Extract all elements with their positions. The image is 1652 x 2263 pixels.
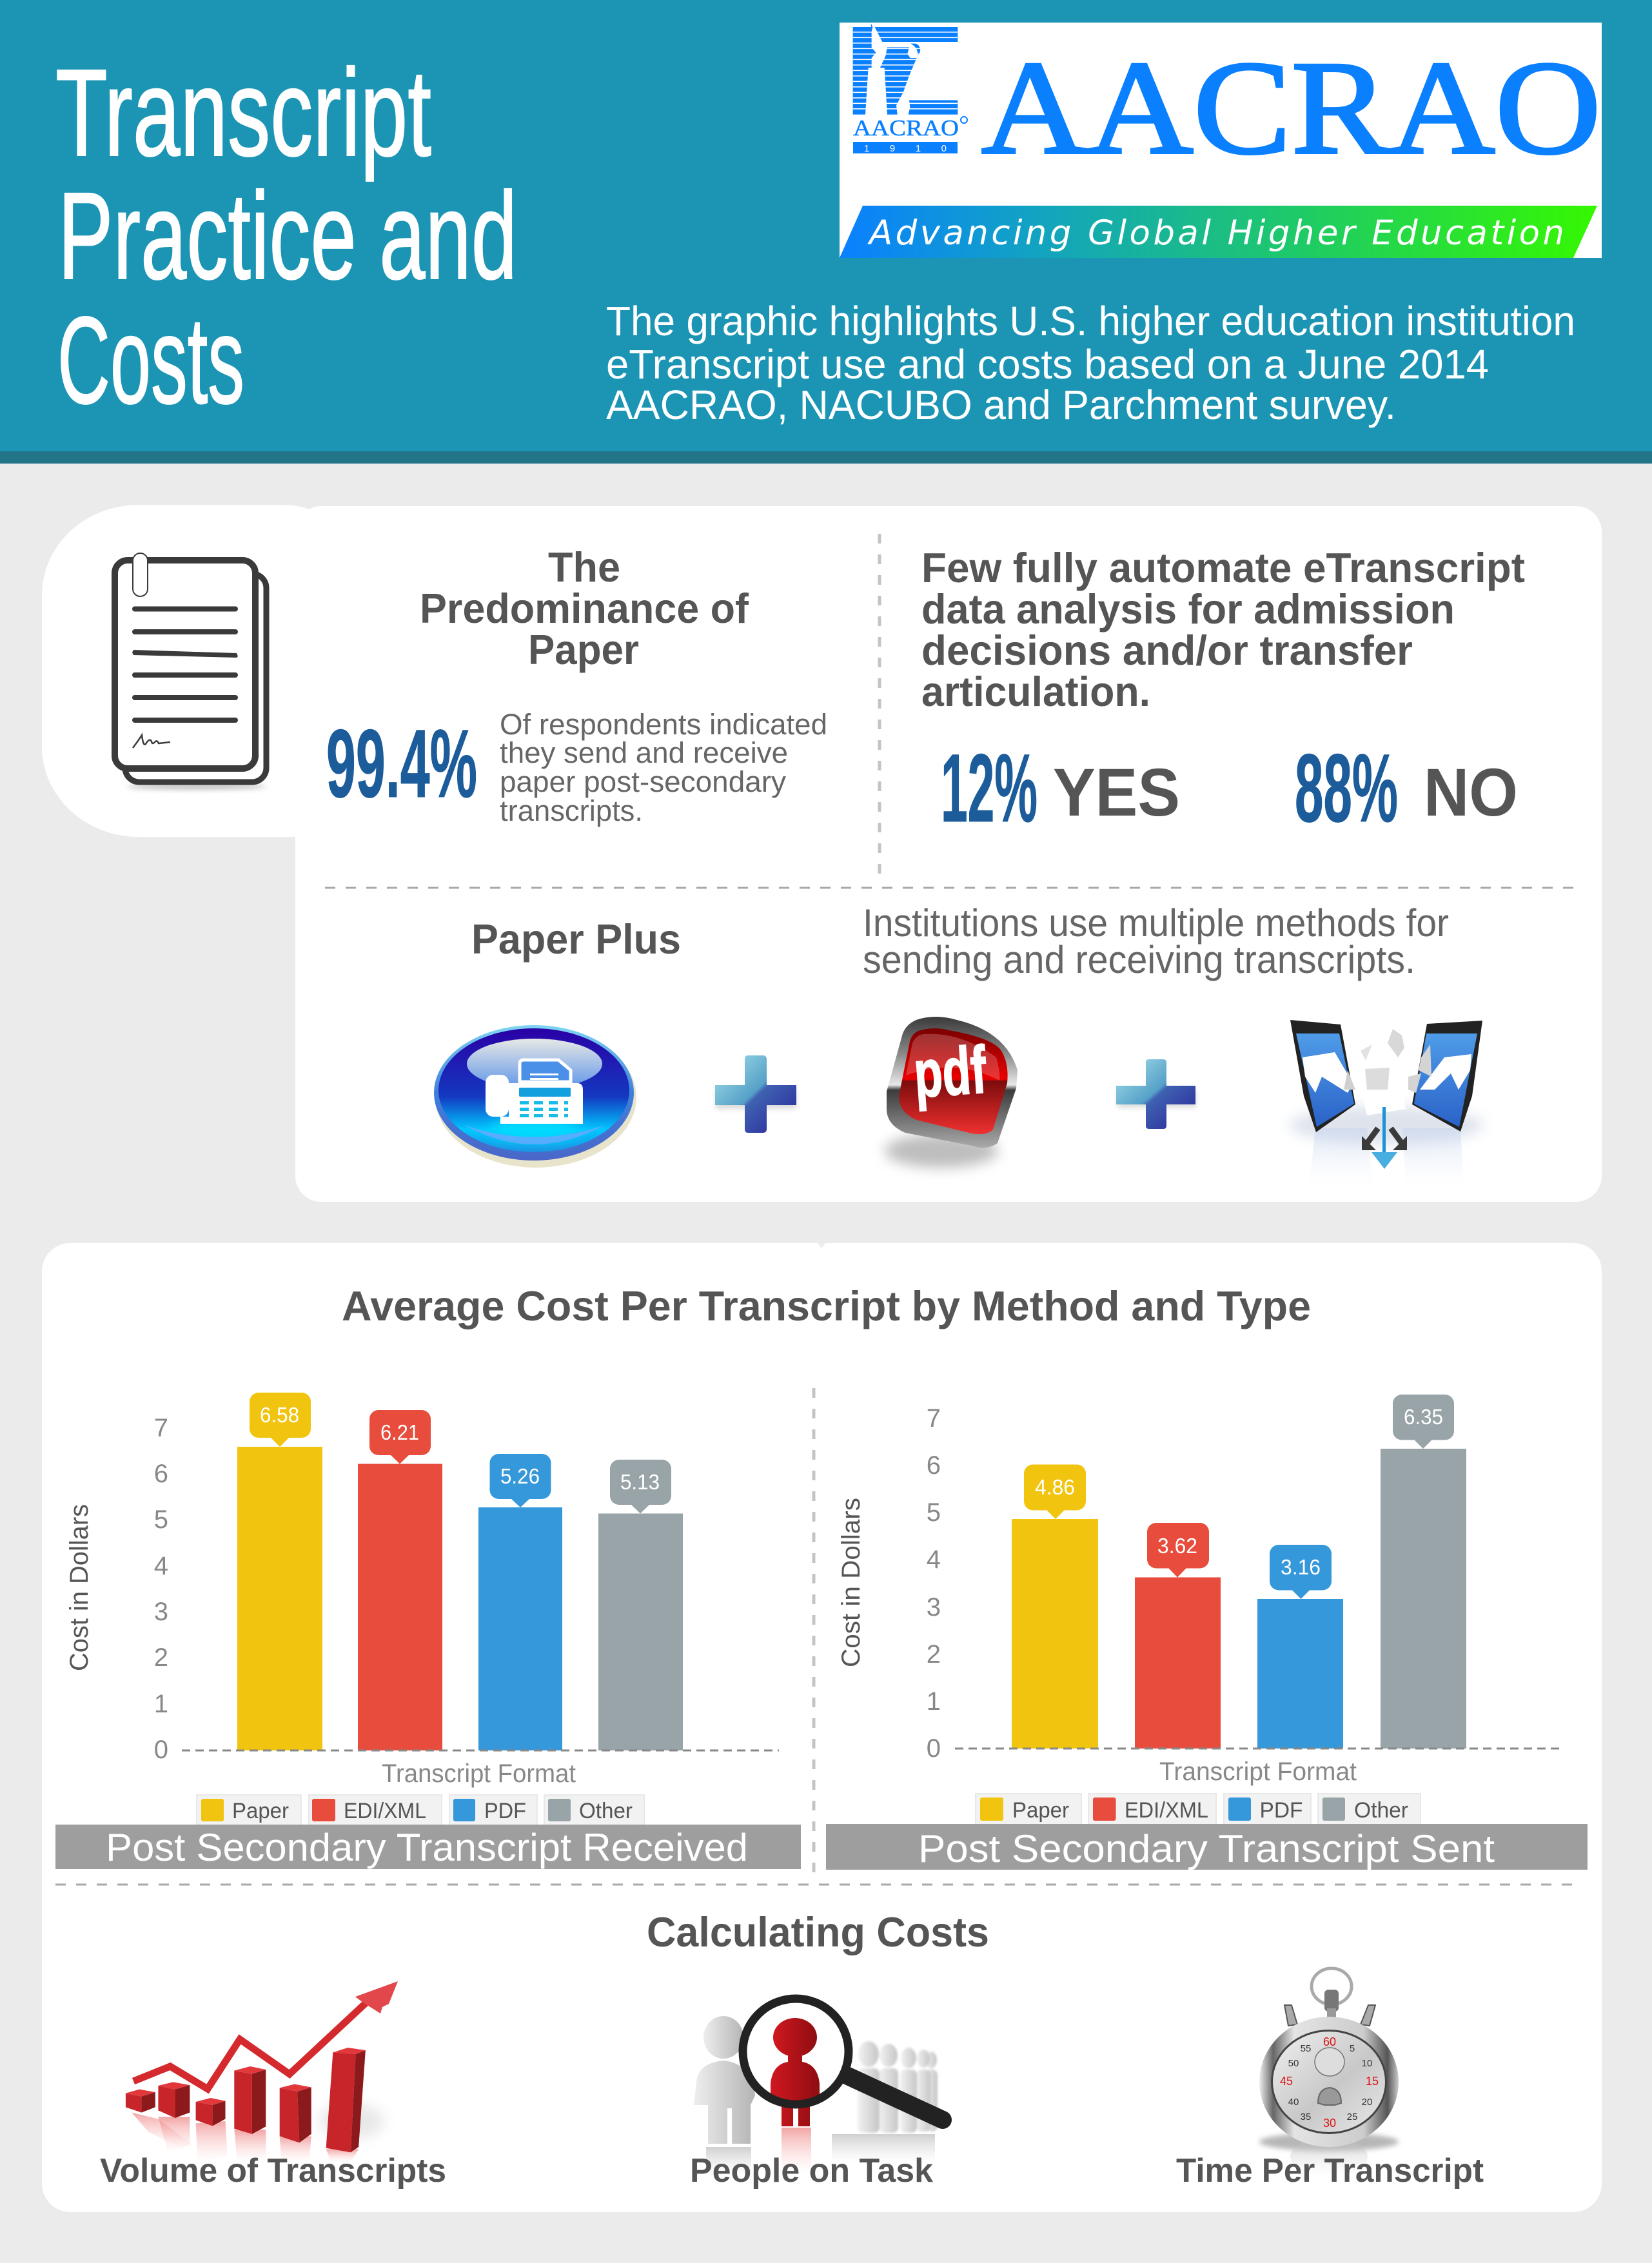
text block: respondents: transcripts. — [500, 794, 643, 827]
title: Transcript — [55, 43, 431, 182]
tagline banner — [840, 206, 1597, 258]
legend: EDI/XML — [1125, 1798, 1208, 1823]
y axis ticks: 2 — [927, 1640, 941, 1669]
caption: time per transcript: Time Per Transcript — [1176, 2152, 1484, 2190]
bar: other — [1381, 1395, 1466, 1749]
icon: stopwatch: 60 — [1323, 2035, 1336, 2048]
logo wordmark: AACRAO — [981, 34, 1601, 182]
y axis ticks: 7 — [927, 1404, 941, 1433]
heading: few fully automate: data analysis for admission — [921, 585, 1455, 632]
chart: post secondary transcript sent — [826, 1395, 1588, 1870]
y axis ticks: 4 — [927, 1545, 941, 1574]
bar: pdf: 3.16 — [1281, 1555, 1321, 1579]
icon: stopwatch: 30 — [1323, 2117, 1336, 2130]
bar: pdf — [1257, 1545, 1343, 1749]
legend: Other — [1354, 1798, 1408, 1823]
icon: stopwatch: 45 — [1280, 2075, 1293, 2088]
text block: respondents: they send and receive — [500, 736, 788, 769]
heading: calculating costs: Calculating Costs — [647, 1908, 989, 1955]
icon: stopwatch: 40 — [1288, 2097, 1299, 2108]
intro text: eTranscript use and costs based on a June 2014 — [606, 341, 1489, 387]
icon: stopwatch: 5 — [1350, 2043, 1355, 2054]
y axis ticks: 5 — [154, 1505, 168, 1534]
text block: respondents — [500, 708, 827, 827]
bar: pdf — [478, 1454, 562, 1750]
logo: AACRAO — [840, 23, 1602, 258]
icon: AACRAO crest — [853, 23, 967, 154]
icon: stopwatch: 25 — [1347, 2111, 1357, 2122]
bar: edi/xml — [358, 1410, 442, 1750]
y axis ticks: 1 — [154, 1690, 168, 1718]
heading: few fully automate — [921, 544, 1525, 715]
y axis ticks: 0 — [154, 1736, 168, 1764]
chart caption bar: Post Secondary Transcript Received — [106, 1826, 748, 1869]
text block: respondents: Of respondents indicated — [500, 708, 827, 741]
bar: paper — [237, 1393, 322, 1750]
legend — [197, 1795, 644, 1827]
title: Costs — [57, 291, 244, 429]
heading: The Predominance of Paper — [420, 544, 749, 673]
heading: few fully automate: Few fully automate eTranscript — [921, 544, 1525, 591]
legend — [976, 1794, 1421, 1826]
stat: 88% no: NO — [1424, 755, 1518, 830]
icon: stopwatch — [1259, 1968, 1399, 2176]
icon: paper document — [115, 553, 266, 790]
legend: Other — [579, 1799, 633, 1823]
heading: Paper Plus: Paper Plus — [471, 916, 681, 963]
icon: AACRAO crest: 1 9 1 0 — [864, 143, 947, 154]
text block: respondents: paper post-secondary — [500, 765, 787, 798]
icon: pdf button: pdf — [912, 1032, 989, 1112]
bar: other: 5.13 — [620, 1470, 660, 1494]
intro text: AACRAO, NACUBO and Parchment survey. — [606, 382, 1396, 428]
y axis ticks: 5 — [927, 1498, 941, 1527]
legend: PDF — [1260, 1798, 1303, 1823]
bar: other — [598, 1460, 683, 1750]
heading: The Predominance of Paper: Paper — [528, 626, 639, 673]
text block: institutions — [863, 901, 1449, 981]
heading: average cost: Average Cost Per Transcript by Method and Type — [342, 1282, 1311, 1329]
y axis ticks — [154, 1414, 168, 1764]
icon: people with magnifying glass — [694, 1999, 943, 2176]
bar: paper: 4.86 — [1035, 1475, 1075, 1499]
bar: paper: 6.58 — [260, 1403, 299, 1427]
tagline banner: Advancing Global Higher Education — [867, 213, 1564, 253]
legend: PDF — [484, 1799, 526, 1823]
header band — [0, 0, 1652, 464]
panel: paper and methods — [295, 506, 1602, 1202]
text block: institutions: sending and receiving transcripts. — [863, 938, 1415, 981]
caption: volume of transcripts: Volume of Transcripts — [100, 2152, 446, 2190]
y axis ticks: 3 — [927, 1593, 941, 1621]
icon: stopwatch: 15 — [1366, 2075, 1379, 2088]
icon: stopwatch: 20 — [1362, 2097, 1372, 2108]
bar: edi/xml: 3.62 — [1157, 1534, 1197, 1558]
x axis title: Transcript Format — [1159, 1758, 1357, 1786]
y axis ticks: 7 — [154, 1414, 168, 1442]
chart: post secondary transcript received — [55, 1393, 801, 1869]
icon: pdf button — [885, 1017, 1018, 1168]
icon: stopwatch: 35 — [1301, 2111, 1311, 2122]
title: Practice and — [58, 166, 517, 305]
bar: edi/xml — [1135, 1523, 1221, 1749]
stat: 88% no: 88% — [1295, 734, 1398, 842]
x axis title: Transcript Format — [382, 1759, 576, 1788]
y axis ticks: 6 — [154, 1460, 168, 1488]
bar: edi/xml: 6.21 — [380, 1420, 419, 1444]
title — [55, 43, 517, 429]
bar: pdf: 5.26 — [500, 1464, 540, 1488]
bar: other: 6.35 — [1404, 1405, 1443, 1429]
intro text: The graphic highlights U.S. higher education institution — [606, 298, 1575, 344]
heading: The Predominance of Paper: The — [548, 544, 620, 591]
panel: costs — [42, 1243, 1602, 2212]
icon: stopwatch: 10 — [1362, 2058, 1372, 2069]
legend: EDI/XML — [344, 1799, 426, 1823]
caption: people on task: People on Task — [690, 2152, 933, 2190]
text block: institutions: Institutions use multiple methods for — [863, 901, 1449, 945]
stat: 12% yes: 12% — [941, 734, 1037, 842]
icon: plus sign — [715, 1055, 796, 1133]
chart caption bar — [826, 1824, 1588, 1870]
icon: tablets exchanging documents — [1290, 1020, 1483, 1186]
icon: fax button — [434, 1025, 636, 1168]
heading: few fully automate: articulation. — [921, 668, 1150, 715]
icon: stopwatch: 50 — [1288, 2058, 1299, 2069]
y axis ticks: 0 — [927, 1734, 941, 1763]
panel: left tab — [42, 505, 322, 837]
chart caption bar: Post Secondary Transcript Sent — [918, 1827, 1495, 1870]
y axis ticks: 6 — [927, 1451, 941, 1480]
icon: AACRAO crest: AACRAO — [853, 115, 959, 141]
icon: stopwatch: 55 — [1301, 2043, 1311, 2054]
stat: 99.4%: 99.4% — [326, 709, 477, 818]
heading: few fully automate: decisions and/or transfer — [921, 627, 1413, 674]
y axis ticks: 4 — [154, 1552, 168, 1580]
heading: The Predominance of Paper: Predominance of — [420, 585, 749, 632]
y axis title: Cost in Dollars — [65, 1504, 93, 1671]
intro text — [606, 298, 1575, 428]
legend: Paper — [232, 1799, 289, 1823]
icon: plus sign — [1116, 1059, 1196, 1129]
y axis title: Cost in Dollars — [837, 1498, 865, 1667]
y axis ticks: 1 — [927, 1687, 941, 1716]
y axis ticks: 2 — [154, 1643, 168, 1672]
legend: Paper — [1012, 1798, 1069, 1823]
icon: volume bar chart with arrow — [126, 1981, 398, 2162]
y axis ticks — [927, 1404, 941, 1763]
bar: paper — [1012, 1465, 1098, 1749]
y axis ticks: 3 — [154, 1598, 168, 1626]
stat: 12% yes: YES — [1053, 755, 1180, 830]
